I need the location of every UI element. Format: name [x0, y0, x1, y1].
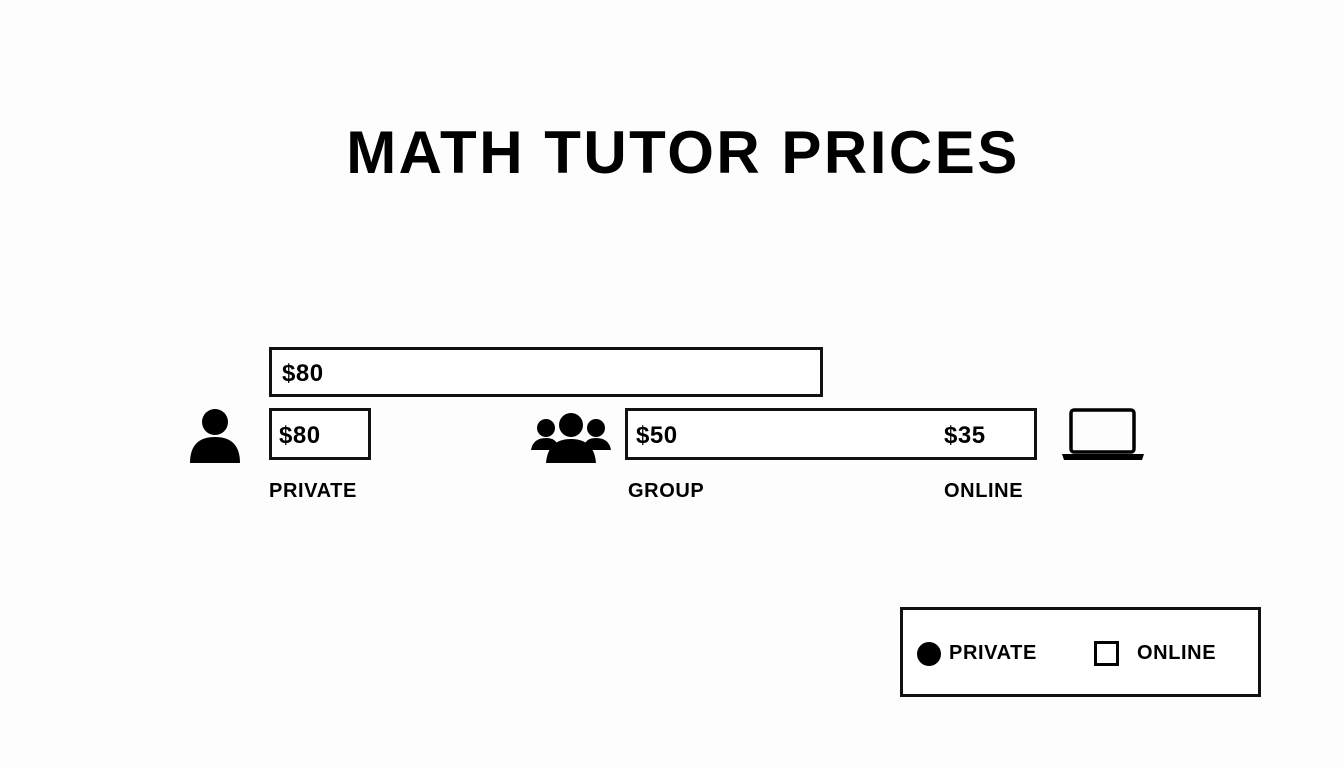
- bar: group/online: [625, 408, 1037, 460]
- bar: top $80: [269, 347, 823, 397]
- label: group: GROUP: [628, 480, 704, 502]
- label: online: ONLINE: [944, 480, 1023, 502]
- legend: private: PRIVATE: [949, 642, 1037, 664]
- legend: online: [1094, 641, 1216, 666]
- icon: laptop: [1062, 408, 1144, 460]
- title: MATH TUTOR PRICES: [346, 119, 1020, 186]
- legend: private: [917, 642, 1037, 666]
- bar: group/online: $35: [944, 422, 986, 449]
- icon: person: [190, 409, 240, 463]
- icon: group: [531, 413, 611, 463]
- bar: private $80: $80: [279, 422, 321, 449]
- label: private: PRIVATE: [269, 480, 357, 502]
- bar: group/online: $50: [636, 422, 678, 449]
- bar: private $80: [269, 408, 371, 460]
- legend: online: ONLINE: [1137, 642, 1216, 664]
- legend: [900, 607, 1261, 697]
- bar: top $80: $80: [282, 360, 324, 387]
